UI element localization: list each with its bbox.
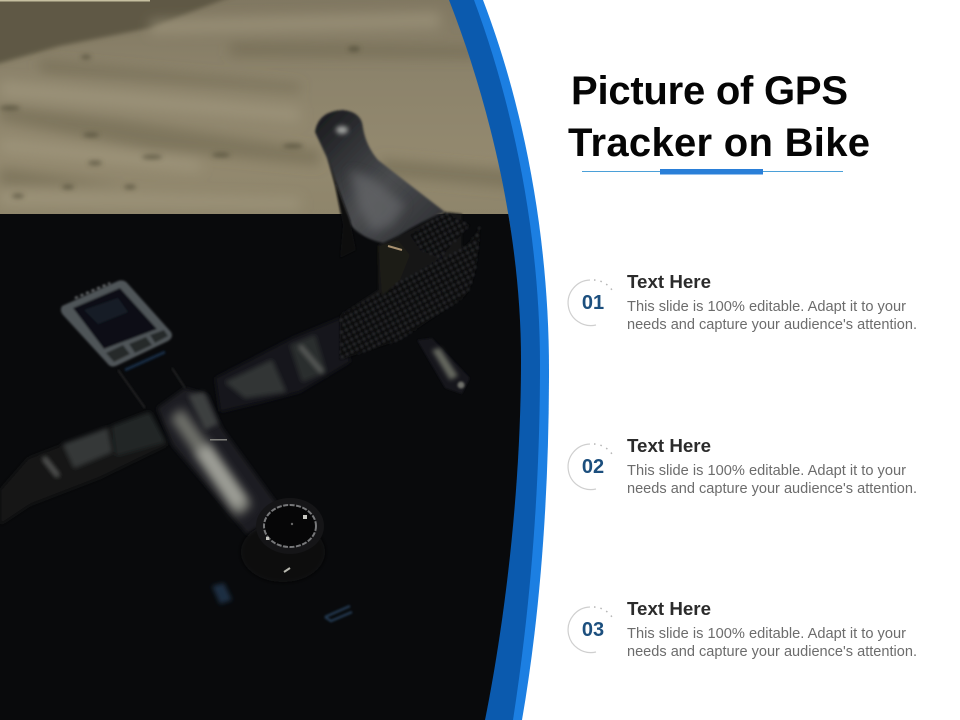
item 01 heading: Text Here xyxy=(627,271,711,292)
item 01 xyxy=(568,271,917,333)
item 02 description xyxy=(627,463,917,497)
item 01 description: needs and capture your audience's attention. xyxy=(627,317,917,333)
photo: GPS tracker on bike handlebar xyxy=(0,0,530,720)
brake hood shifter xyxy=(315,110,445,258)
item 02 heading: Text Here xyxy=(627,435,711,456)
item 02 description: needs and capture your audience's attention. xyxy=(627,481,917,497)
handlebar stem xyxy=(157,388,285,535)
item 02 description: This slide is 100% editable. Adapt it to your xyxy=(627,463,906,479)
badge 01 xyxy=(568,280,612,326)
title underline xyxy=(582,169,843,174)
item 01 description: This slide is 100% editable. Adapt it to your xyxy=(627,299,906,315)
lower drop lever xyxy=(417,338,470,394)
handlebar right section xyxy=(215,316,350,412)
wooden deck background xyxy=(0,0,530,230)
badge 02 xyxy=(568,444,612,490)
title: Tracker on Bike xyxy=(568,121,870,165)
badge 03: 03 xyxy=(582,619,604,641)
badge 03 xyxy=(568,607,612,653)
curved dark blue band xyxy=(0,0,540,720)
item 03 xyxy=(568,598,917,660)
badge 01: 01 xyxy=(582,292,604,314)
item 02 xyxy=(568,435,917,497)
item 03 description: This slide is 100% editable. Adapt it to your xyxy=(627,626,906,642)
item 03 heading: Text Here xyxy=(627,598,711,619)
stem top cap xyxy=(248,498,324,573)
GPS bike computer xyxy=(61,280,185,408)
title: Picture of GPS xyxy=(571,69,848,113)
bar tape xyxy=(340,212,480,360)
item 01 description xyxy=(627,299,917,333)
title xyxy=(568,69,870,165)
item 03 description xyxy=(627,626,917,660)
badge 02: 02 xyxy=(582,456,604,478)
dark shadowed ground xyxy=(0,214,530,720)
item 03 description: needs and capture your audience's attention. xyxy=(627,644,917,660)
handlebar left grip xyxy=(0,412,168,525)
curved light blue band xyxy=(0,0,549,720)
